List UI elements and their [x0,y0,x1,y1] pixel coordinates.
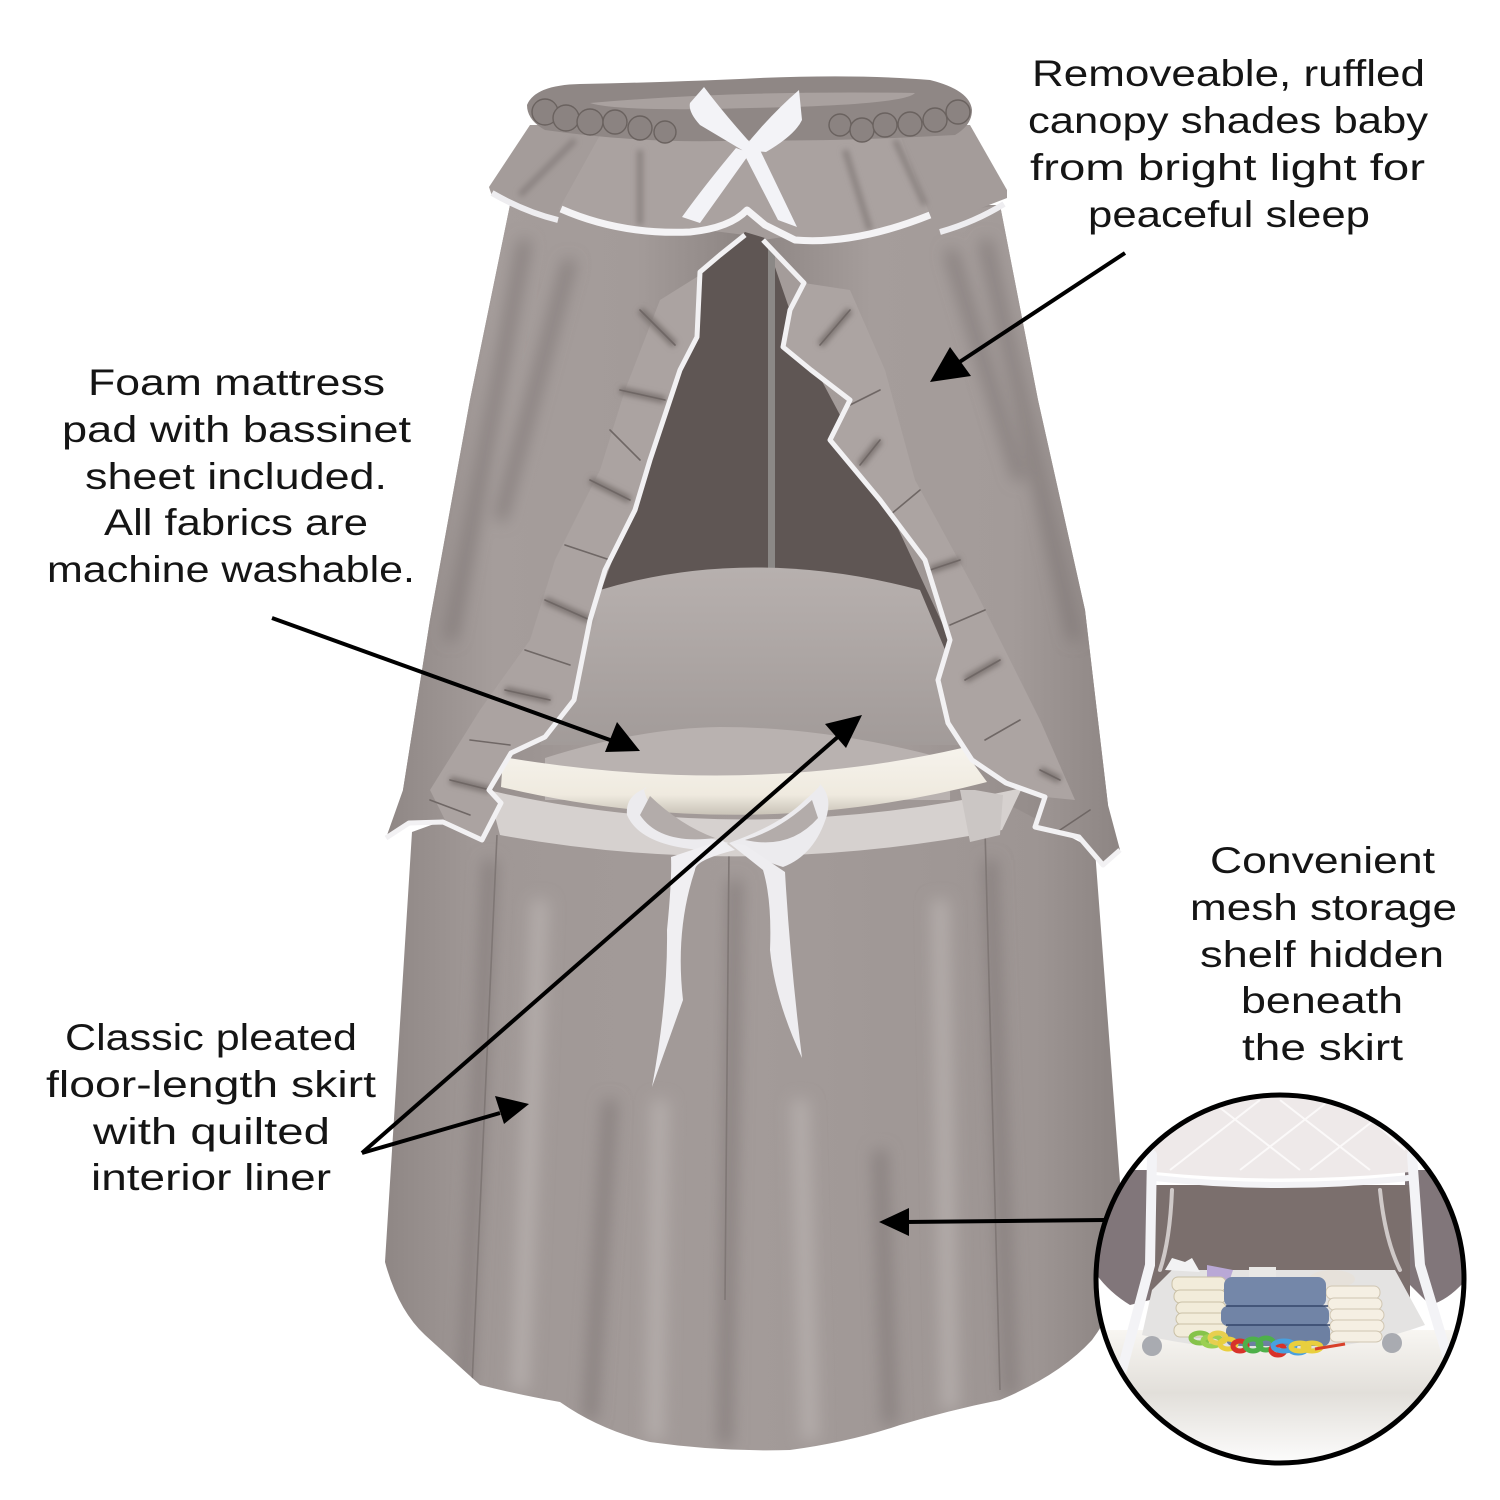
text: skirt feature [46,1017,377,1198]
text: skirt feature: with quilted [92,1111,330,1152]
stored items at back [1165,1258,1200,1272]
text: canopy feature: from bright light for [1030,147,1425,188]
text: storage feature [1190,840,1457,1068]
text: canopy feature [1028,53,1429,235]
mesh shelf [1142,1270,1425,1350]
skirt satin bow [627,783,828,1087]
frame legs and rail [1122,1155,1447,1370]
padded rim [501,748,987,815]
text: storage feature: mesh storage [1190,887,1457,928]
text: skirt feature: floor-length skirt [46,1064,377,1105]
text: mattress feature [47,362,415,590]
right ruffle band [783,283,1075,800]
ruffle creases [430,310,1090,830]
canopy support pole [768,240,775,570]
text: skirt feature: interior liner [91,1157,331,1198]
text: canopy feature: canopy shades baby [1028,100,1429,141]
canopy folds [450,240,1075,640]
text: mattress feature: machine washable. [47,549,415,590]
mattress pad [545,727,950,800]
canopy back drape [403,205,1108,860]
text: canopy feature: Removeable, ruffled [1032,53,1425,94]
dark interior opening [560,232,950,740]
text: mattress feature: Foam mattress [88,362,385,403]
floor [1106,1330,1454,1454]
inset: mesh storage shelf [1090,1090,1470,1470]
back wall [1150,1185,1410,1300]
text: storage feature: beneath [1241,980,1403,1021]
right ribbon trim [763,240,1120,865]
skirt [385,800,1126,1450]
valance trim [561,209,930,241]
text: mattress feature: sheet included. [85,456,387,497]
quilted back wall [540,568,985,745]
folded blue towels [1221,1277,1330,1346]
left diaper stack [1172,1277,1228,1337]
side skirt pieces [1098,1170,1150,1305]
bassinet illustration [385,76,1126,1450]
text: storage feature: Convenient [1210,840,1436,881]
waist band [488,788,1022,856]
ruffled canopy ring [527,76,972,143]
text: mattress feature: All fabrics are [104,502,368,543]
colourful toy rings [1191,1333,1345,1355]
arrow: canopy callout [930,253,1125,382]
ruffle shading [450,310,1060,790]
text: storage feature: shelf hidden [1200,934,1444,975]
double arrow: skirt and liner callout [362,715,862,1153]
text: mattress feature: pad with bassinet [62,409,412,450]
text: canopy feature: peaceful sleep [1088,194,1370,235]
skirt folds [465,830,1010,1445]
text: skirt feature: Classic pleated [65,1017,357,1058]
left ribbon trim [386,235,745,840]
canopy right panel [763,205,1120,865]
casters [1142,1336,1162,1356]
front valance [559,135,930,242]
band tabs [960,790,1003,842]
quilted underside [1154,1098,1409,1178]
right diaper stack [1326,1286,1384,1342]
canopy satin bow [682,87,802,227]
canopy left panel [386,205,745,840]
text: storage feature: the skirt [1242,1027,1404,1068]
left ruffle band [430,275,700,838]
arrow: mattress callout [272,618,640,752]
back valance [489,125,1007,220]
skirt pleats [472,830,1000,1390]
arrow: storage callout [879,1208,1105,1236]
